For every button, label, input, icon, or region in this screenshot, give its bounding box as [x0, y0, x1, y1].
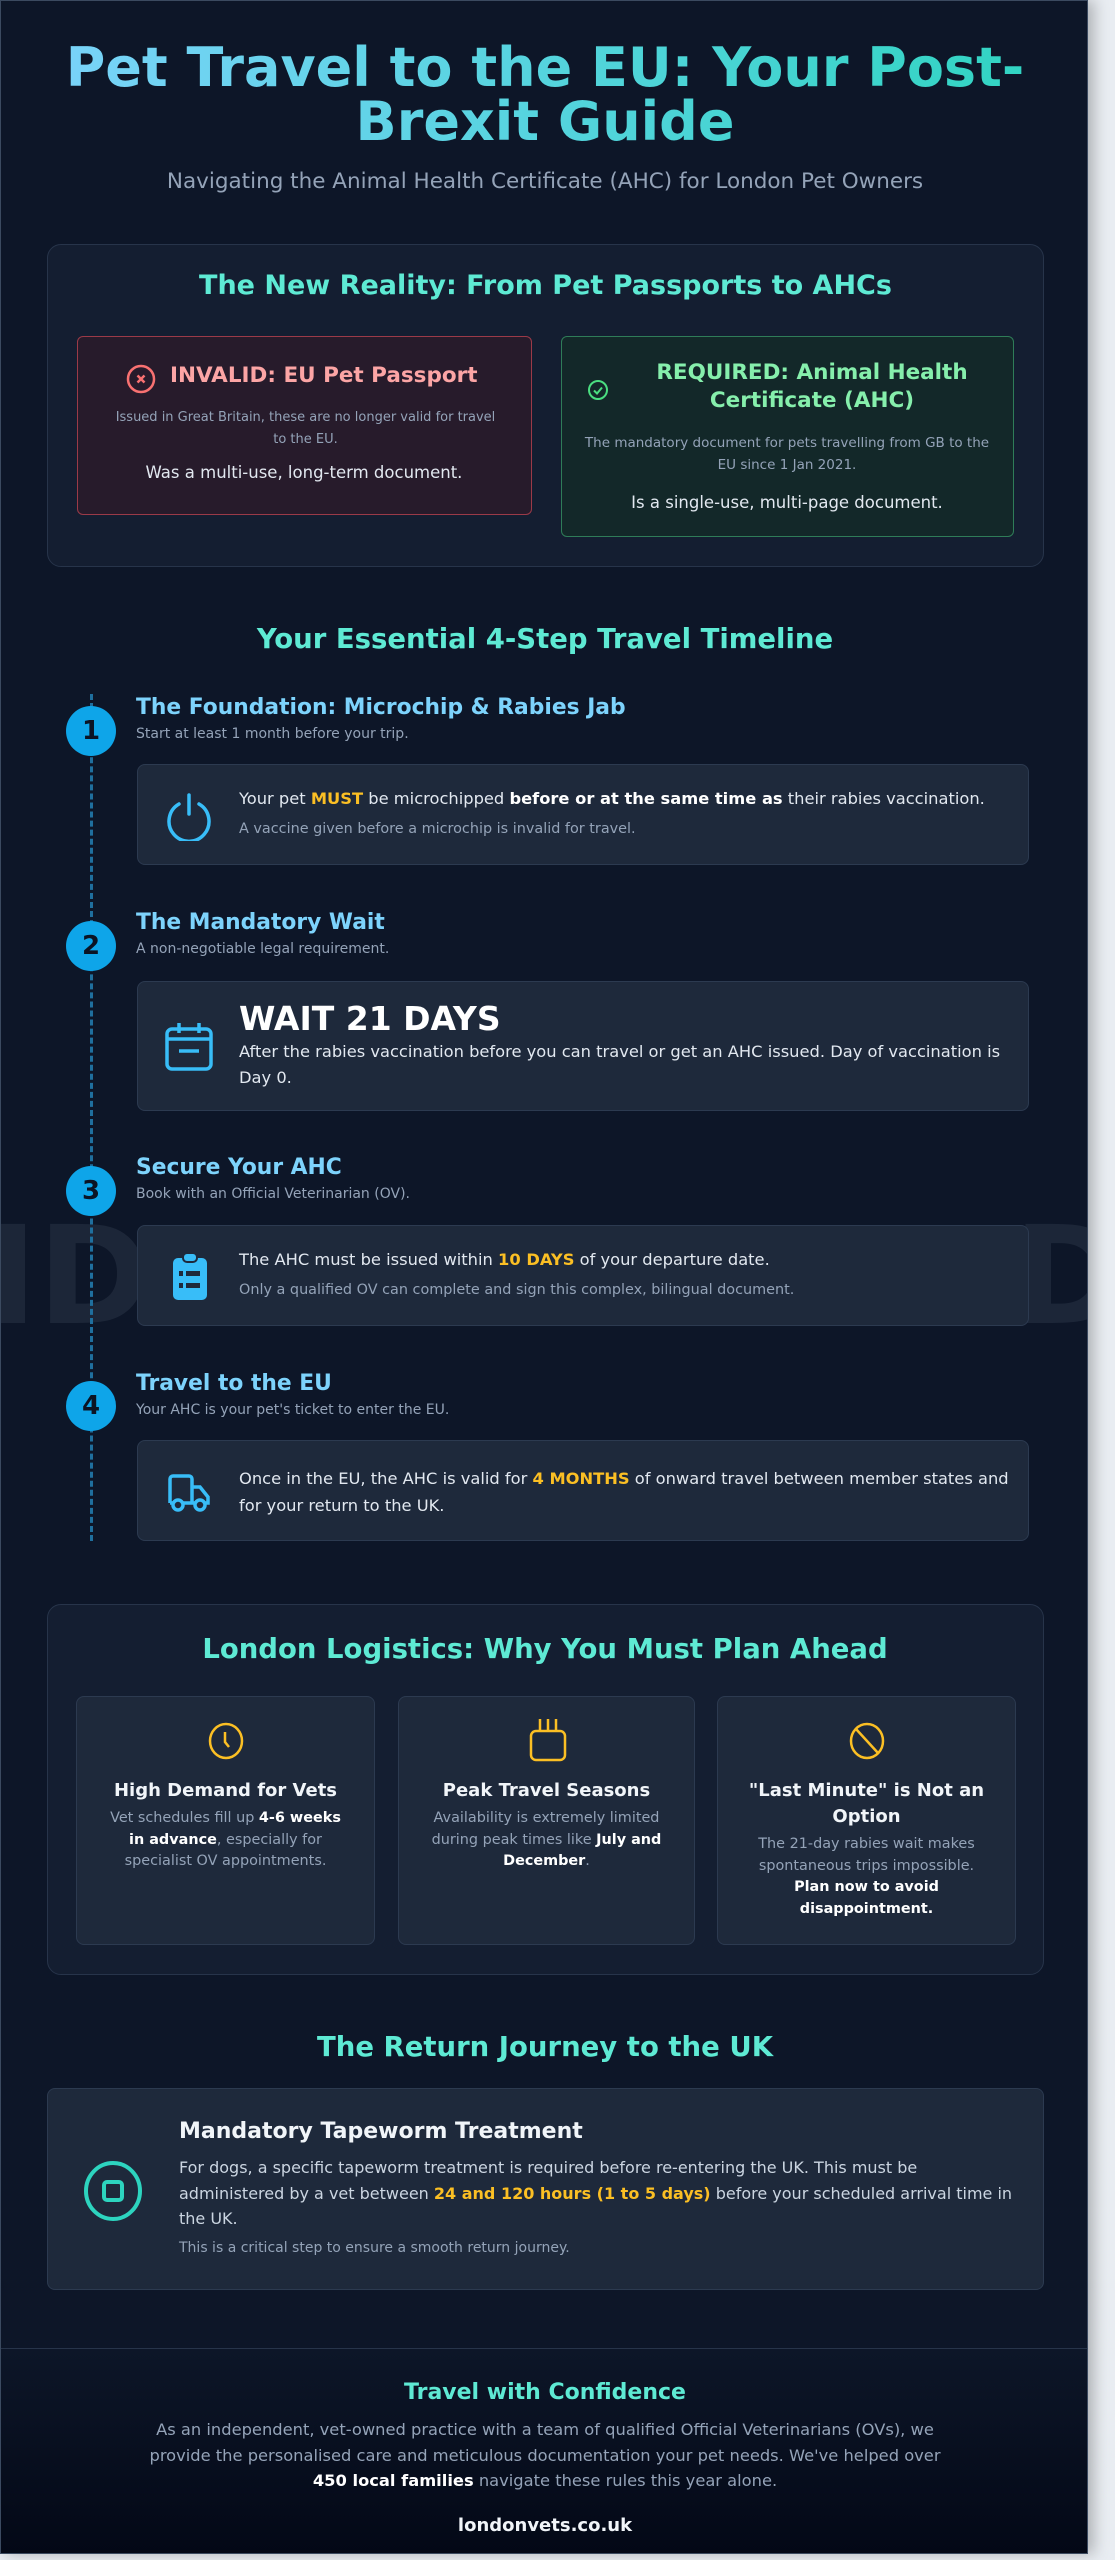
icon: power: [167, 793, 211, 841]
card: invalid passport: Was a multi-use, long-term document.: [146, 463, 462, 482]
step 3: 3: [82, 1176, 100, 1206]
step 3: Only a qualified OV can complete and sign this complex, bilingual document.: [239, 1282, 794, 1298]
panel: tapeworm: [47, 2088, 1044, 2290]
card: required AHC: REQUIRED: Animal Health Certificate (AHC): [656, 360, 968, 413]
card: last minute: The 21-day rabies wait makes spontaneous trips impossible. Plan now to avoid disappointment.: [758, 1836, 975, 1916]
icon: calendar: [165, 1023, 213, 1071]
title: Pet Travel to the EU: Your Post-: [66, 36, 1024, 99]
card: peak seasons: Availability is extremely limited during peak times like July and December.: [432, 1810, 661, 1869]
heading: new reality: The New Reality: From Pet Passports to AHCs: [199, 270, 892, 301]
panel: london logistics: [47, 1604, 1044, 1975]
step 1: A vaccine given before a microchip is invalid for travel.: [239, 821, 636, 837]
heading: return journey: The Return Journey to the UK: [317, 2031, 773, 2063]
panel: tapeworm: For dogs, a specific tapeworm treatment is required before re-entering the UK. This must be administered by a vet between 24 and 120 hours (1 to 5 days) before your scheduled arrival time in the UK.: [179, 2158, 1012, 2228]
card: invalid passport: Issued in Great Britain, these are no longer valid for travel to the EU.: [116, 410, 495, 447]
icon: teal ring: [84, 2161, 142, 2221]
footer heading: Travel with Confidence: [404, 2380, 686, 2405]
icon: x circle: [126, 364, 156, 394]
icon: clipboard: [173, 1254, 207, 1300]
card: required AHC: The mandatory document for pets travelling from GB to the EU since 1 Jan 2021.: [585, 435, 989, 473]
step 1: The Foundation: Microchip & Rabies Jab: [136, 695, 626, 720]
title: Brexit Guide: [356, 90, 734, 153]
card: high demand: High Demand for Vets: [114, 1780, 337, 1801]
icon: truck: [168, 1474, 210, 1512]
card: required AHC: [561, 336, 1014, 537]
icon: prohibited: [850, 1722, 884, 1760]
card: invalid passport: [77, 336, 532, 515]
step 2: [66, 910, 1029, 1111]
watermark: [0, 1198, 1088, 1356]
panel: tapeworm: This is a critical step to ensure a smooth return journey.: [179, 2240, 570, 2256]
step 1: Your pet MUST be microchipped before or at the same time as their rabies vaccination.: [239, 789, 985, 808]
subtitle: Navigating the Animal Health Certificate (AHC) for London Pet Owners: [167, 169, 923, 194]
card: invalid passport: INVALID: EU Pet Passport: [170, 363, 478, 388]
step 2: A non-negotiable legal requirement.: [136, 941, 389, 957]
step 4: 4: [82, 1391, 100, 1421]
heading: logistics: London Logistics: Why You Must Plan Ahead: [202, 1633, 888, 1665]
panel: new reality: [47, 244, 1044, 567]
step 2: After the rabies vaccination before you can travel or get an AHC issued. Day of vaccination is Day 0.: [239, 1042, 1000, 1087]
title: [1, 41, 1089, 149]
footer text: As an independent, vet-owned practice with a team of qualified Official Veterinarians (OVs), we provide the personalised care and meticulous documentation your pet needs. We've helped over 450 local families navigate these rules this year alone.: [149, 2420, 941, 2490]
icon: clock: [208, 1722, 244, 1760]
card: high demand: Vet schedules fill up 4-6 weeks in advance, especially for specialist OV appointments.: [110, 1810, 341, 1869]
timeline line: [90, 694, 93, 1541]
footer: [1, 2348, 1089, 2555]
icon: plug: [530, 1719, 566, 1762]
step 2: 2: [82, 931, 100, 961]
card: required AHC: Is a single-use, multi-page document.: [631, 493, 943, 512]
step 1: 1: [82, 716, 100, 746]
card: peak seasons: [398, 1696, 695, 1945]
card: high demand: [76, 1696, 375, 1945]
step 4: Once in the EU, the AHC is valid for 4 MONTHS of onward travel between member states and for your return to the UK.: [239, 1469, 1009, 1515]
footer url: londonvets.co.uk: [458, 2515, 632, 2536]
step 2: The Mandatory Wait: [136, 910, 385, 935]
step 3: [66, 1155, 1029, 1326]
card: last minute: [717, 1696, 1016, 1945]
step 1: Start at least 1 month before your trip.: [136, 726, 409, 742]
heading: timeline: Your Essential 4-Step Travel Timeline: [257, 623, 833, 655]
step 1: [66, 695, 1029, 865]
step 3: Secure Your AHC: [136, 1155, 342, 1180]
step 2: WAIT 21 DAYS: [239, 999, 501, 1038]
step 3: Book with an Official Veterinarian (OV).: [136, 1186, 410, 1202]
step 4: Travel to the EU: [136, 1371, 332, 1396]
card: last minute: "Last Minute" is Not an Option: [749, 1780, 984, 1827]
step 4: [66, 1371, 1029, 1541]
icon: check circle: [588, 380, 608, 400]
panel: tapeworm: Mandatory Tapeworm Treatment: [179, 2119, 583, 2144]
card: peak seasons: Peak Travel Seasons: [443, 1780, 650, 1801]
step 3: The AHC must be issued within 10 DAYS of your departure date.: [239, 1250, 770, 1269]
step 4: Your AHC is your pet's ticket to enter the EU.: [136, 1402, 449, 1418]
